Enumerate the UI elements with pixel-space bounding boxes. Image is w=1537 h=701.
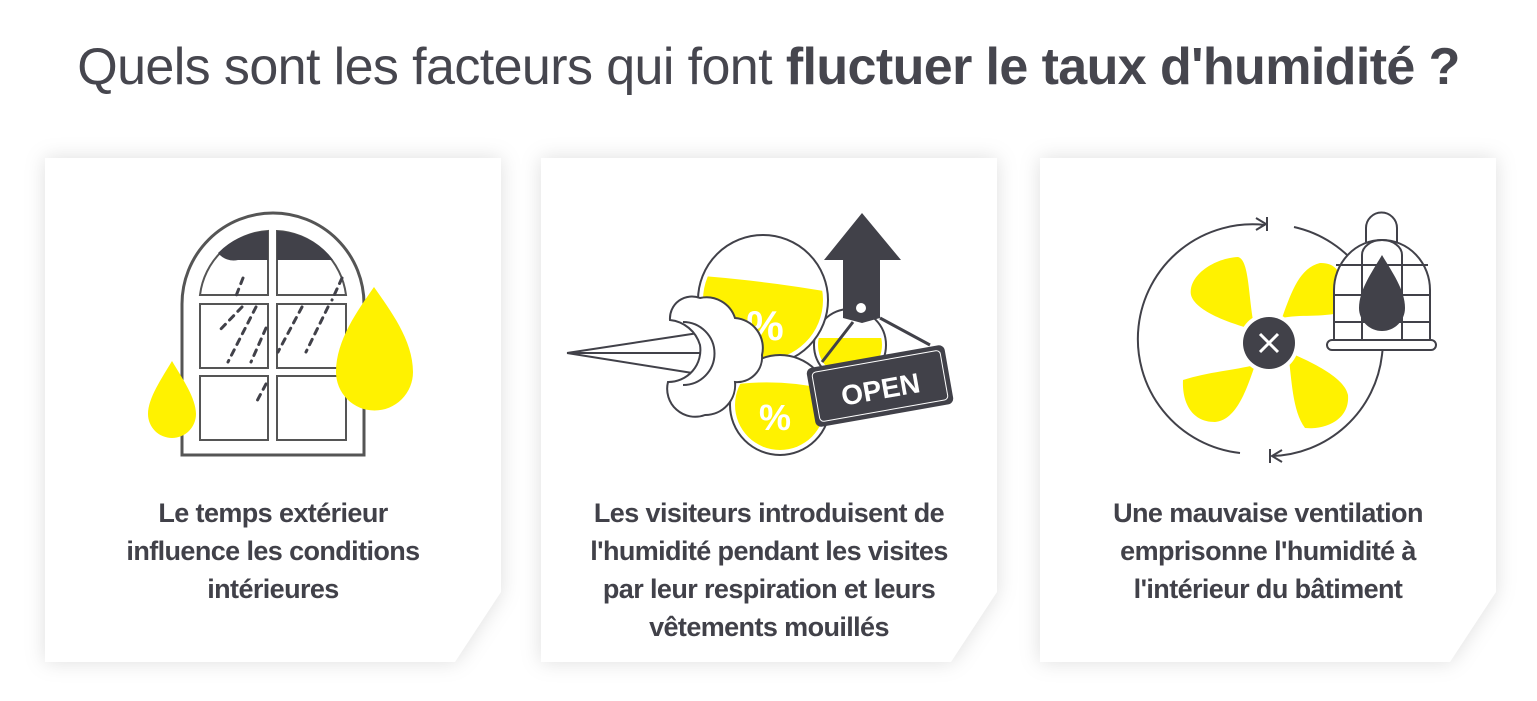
icon: window with drops [148, 212, 413, 456]
text: weather: influence les conditions [126, 536, 420, 566]
title: Quels sont les facteurs qui font fluctuer le taux d'humidité ? [77, 38, 1460, 96]
text: weather: Le temps extérieur [158, 498, 388, 528]
icon: fan and cage [1136, 212, 1437, 463]
icon: visitors breath open sign: % [759, 397, 791, 438]
text: ventilation: emprisonne l'humidité à [1120, 536, 1416, 566]
icon: visitors breath open sign: OPEN [839, 367, 922, 412]
text: ventilation: l'intérieur du bâtiment [1134, 574, 1402, 604]
panel: ventilation [1034, 152, 1502, 668]
text: visitors [590, 498, 948, 642]
text: visitors: Les visiteurs introduisent de [594, 498, 944, 528]
text: weather [126, 498, 420, 604]
text: visitors: vêtements mouillés [649, 612, 889, 642]
text: ventilation [1113, 498, 1423, 604]
icon: visitors breath open sign [566, 213, 954, 456]
text: visitors: l'humidité pendant les visites [590, 536, 948, 566]
text: ventilation: Une mauvaise ventilation [1113, 498, 1423, 528]
panel: visitors [534, 152, 1004, 668]
icon: visitors breath open sign: % [746, 302, 784, 349]
text: visitors: par leur respiration et leurs [603, 574, 935, 604]
text: weather: intérieures [207, 574, 339, 604]
panel: weather [38, 152, 508, 668]
